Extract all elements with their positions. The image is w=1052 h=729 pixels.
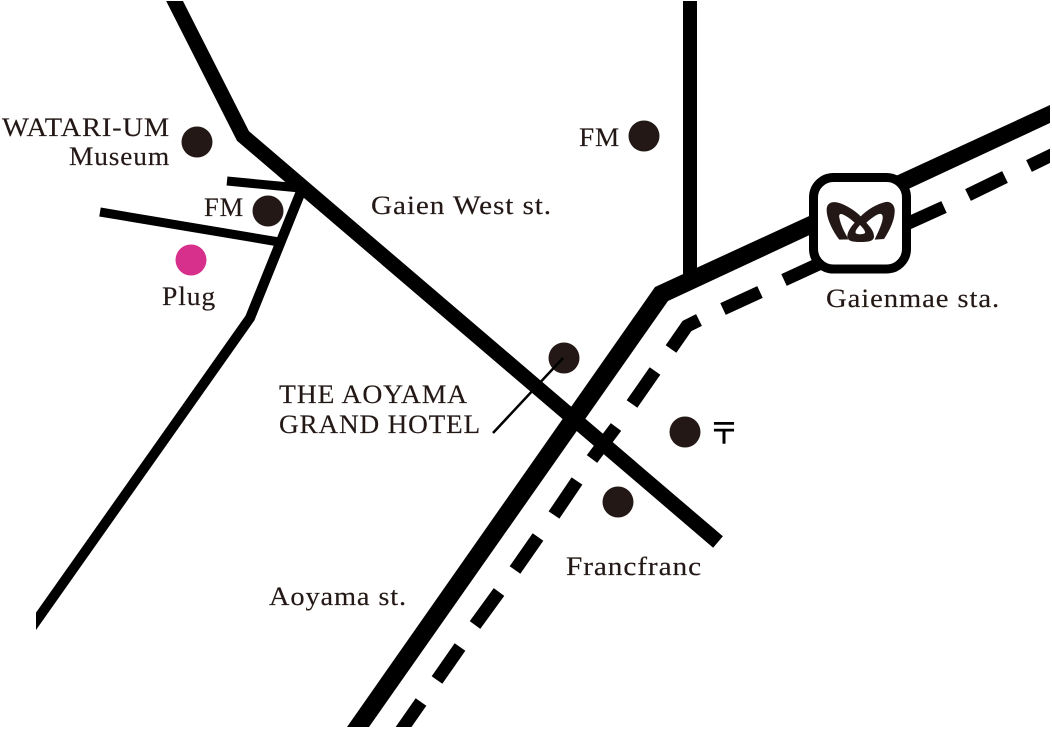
- icon: post office symbol: 〒: [709, 409, 739, 453]
- label: FM west: FM: [204, 192, 244, 222]
- leader line: hotel: [493, 358, 563, 433]
- marker: post office: [670, 416, 700, 448]
- marker: The Aoyama Grand Hotel: [548, 342, 580, 374]
- label: Plug: Plug: [162, 281, 216, 311]
- label: The Aoyama: THE AOYAMA: [279, 379, 468, 409]
- road: north street: [683, 0, 697, 285]
- road: lower side branch: [100, 212, 279, 242]
- metro M symbol: [827, 202, 895, 242]
- road: Gaien West street: [170, 0, 718, 542]
- marker: FM west: [252, 196, 284, 226]
- label: Museum: Museum: [69, 141, 170, 171]
- label: Grand Hotel: GRAND HOTEL: [279, 409, 481, 439]
- label: Gaienmae station: Gaienmae sta.: [826, 283, 1000, 313]
- road: side street to the south-west: [36, 192, 304, 630]
- label: Gaien West street: Gaien West st.: [371, 190, 552, 220]
- marker: Watari-um Museum: [182, 126, 212, 158]
- icon: Gaienmae station metro sign: [814, 178, 906, 269]
- road: Aoyama street: [347, 105, 1050, 727]
- label: FM north: FM: [579, 122, 620, 152]
- sign frame: [814, 178, 906, 269]
- label: Watari-um: WATARI-UM: [2, 112, 170, 142]
- subway line: dashed: [398, 151, 1052, 729]
- marker: Francfranc: [602, 486, 634, 518]
- road: upper side branch: [227, 181, 300, 188]
- marker: Plug: [176, 244, 206, 276]
- label: Francfranc: Francfranc: [566, 551, 702, 581]
- marker: FM north: [628, 120, 660, 152]
- label: Aoyama street: Aoyama st.: [269, 581, 407, 611]
